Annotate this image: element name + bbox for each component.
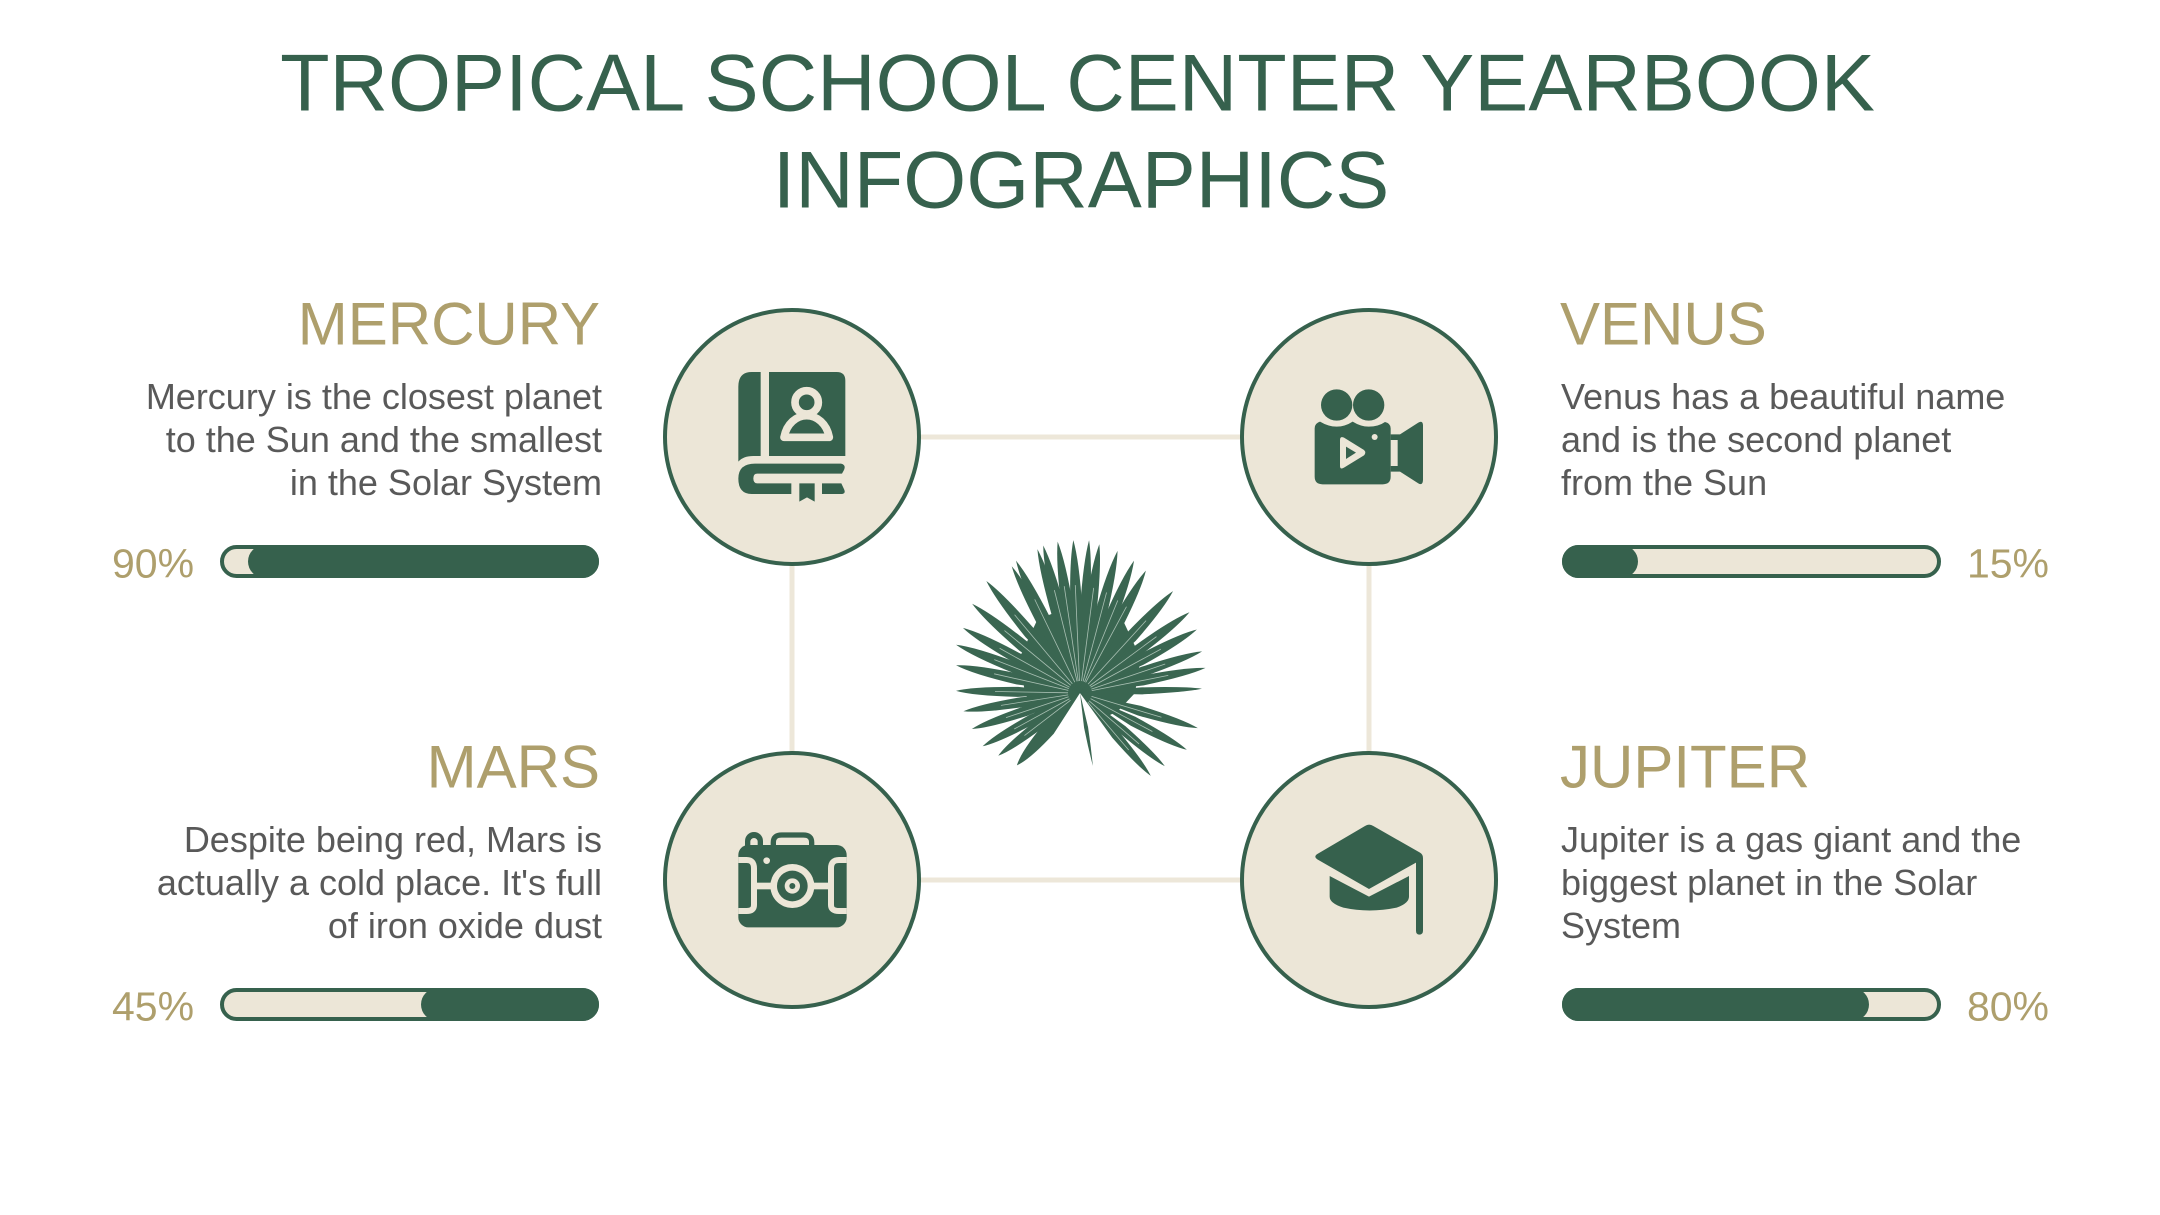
title [280,38,1875,226]
text: venus description: Venus has a beautiful name [1561,376,2005,417]
panel: venus [1560,290,2049,586]
text: mercury description: to the Sun and the smallest [166,419,602,460]
text: jupiter description: Jupiter is a gas giant and the [1561,819,2021,860]
progress bar: mars [222,988,599,1021]
circle icon: photo camera [665,753,919,1007]
circle icon: graduation cap [1242,753,1496,1007]
panel: mercury [112,290,602,586]
progress bar: jupiter [1562,988,1939,1021]
circle icon: book [665,310,919,564]
text: venus description: from the Sun [1561,462,1767,503]
text: venus description: and is the second planet [1561,419,1951,460]
label: mars 45%: 45% [112,984,194,1030]
label: jupiter 80%: 80% [1967,984,2049,1030]
text: mars description: actually a cold place. It's full [157,862,602,903]
progress bar: mercury [222,545,599,578]
text: jupiter description: biggest planet in the Solar [1561,862,1977,903]
label: mercury 90%: 90% [112,540,194,586]
text: mercury description: in the Solar System [290,462,602,503]
text: mercury description: Mercury is the closest planet [146,376,602,417]
title: TROPICAL SCHOOL CENTER YEARBOOK [280,38,1875,128]
label: venus 15%: 15% [1967,540,2049,586]
heading: jupiter: JUPITER [1560,734,1810,800]
connector lines [792,437,1369,880]
icon: palm leaf [954,540,1206,779]
heading: mars: MARS [427,734,600,800]
text: mars description: Despite being red, Mars is [184,819,602,860]
heading: mercury: MERCURY [298,290,600,358]
progress bar: venus [1562,545,1939,578]
title: INFOGRAPHICS [773,136,1389,226]
panel: mars [112,734,602,1030]
circle icon: video camera [1242,310,1496,564]
heading: venus: VENUS [1560,290,1767,358]
text: jupiter description: System [1561,905,1681,946]
panel: jupiter [1560,734,2049,1030]
text: mars description: of iron oxide dust [328,905,602,946]
